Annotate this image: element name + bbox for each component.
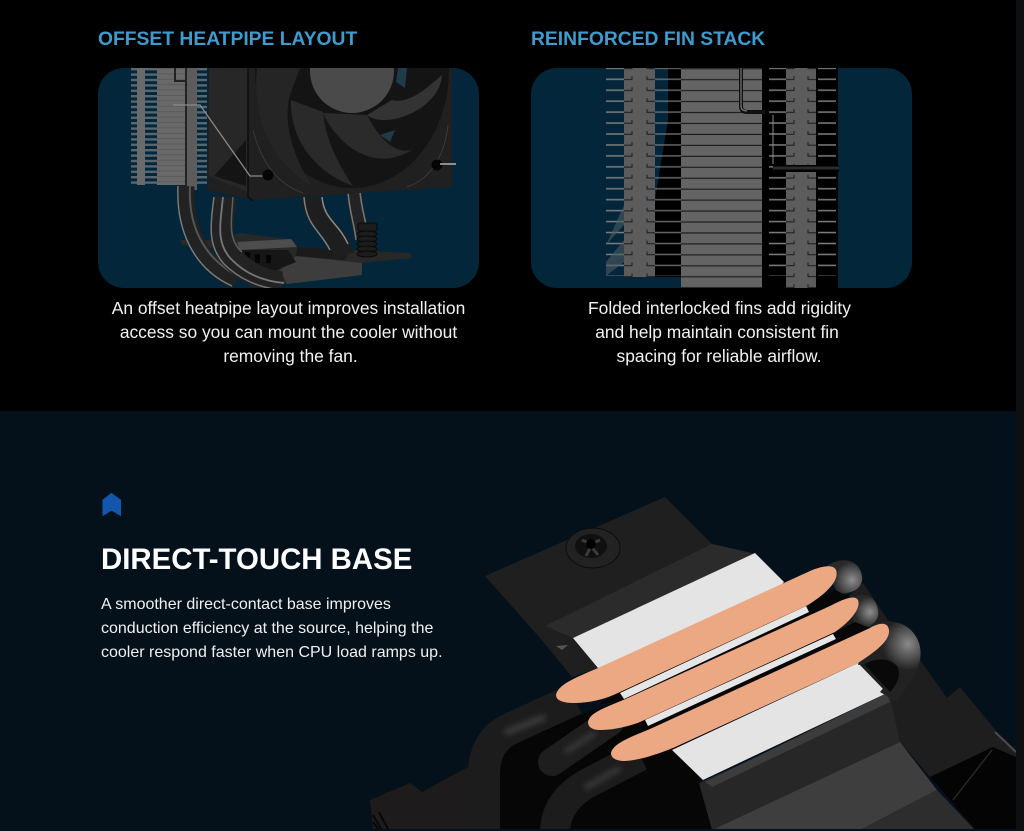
spring screw — [357, 223, 377, 257]
inner right dashes — [769, 68, 786, 276]
description: direct-touch base — [101, 596, 443, 661]
copper contact pills — [556, 566, 889, 761]
heatpipe outline and clip — [741, 68, 839, 172]
left fin column — [624, 68, 655, 277]
caption: offset heatpipe: removing the fan. — [223, 346, 358, 366]
black fin gaps — [655, 68, 838, 288]
gaps between copper pills — [600, 590, 870, 731]
description: direct-touch base: conduction efficiency at the source, helping the — [101, 620, 433, 637]
right plate section — [800, 583, 1016, 777]
illustration: direct-touch cooler base — [370, 497, 1016, 829]
description: direct-touch base: cooler respond faster when CPU load ramps up. — [101, 644, 443, 661]
outer right dashes — [818, 68, 836, 276]
icon: blue bookmark — [102, 493, 121, 516]
caption: reinforced fin stack: Folded interlocked fins add rigidity — [588, 298, 851, 318]
inner left dashes — [655, 68, 681, 276]
caption: reinforced fin stack — [588, 298, 851, 366]
fan clips — [173, 105, 456, 180]
panel: offset heatpipe illustration — [98, 68, 479, 288]
grey base slope — [699, 697, 975, 830]
caption: reinforced fin stack: spacing for reliable airflow. — [617, 346, 821, 366]
dark cavity under pipes — [490, 690, 715, 829]
description: direct-touch base: A smoother direct-contact base improves — [101, 596, 391, 613]
upper silver contact strip — [573, 553, 784, 668]
mounting base plate — [180, 233, 412, 284]
fin stack — [131, 68, 207, 190]
black underside block — [930, 732, 1016, 829]
right margin strip — [1016, 0, 1024, 831]
caption: reinforced fin stack: and help maintain consistent fin — [595, 322, 839, 342]
fan blades — [256, 68, 442, 186]
mounting screw — [566, 528, 620, 568]
caption: offset heatpipe: An offset heatpipe layout improves installation — [112, 298, 465, 318]
caption: offset heatpipe — [112, 298, 465, 366]
panel: reinforced fin stack illustration — [531, 68, 912, 288]
heatpipe tubes — [484, 699, 640, 831]
fan frame — [207, 68, 452, 202]
heading: offset heatpipe layout: OFFSET HEATPIPE LAYOUT — [98, 29, 357, 50]
lower section background — [0, 411, 1024, 831]
heading: reinforced fin stack: REINFORCED FIN STACK — [531, 29, 765, 50]
heatpipe caps — [825, 560, 921, 702]
heatpipes — [178, 186, 367, 290]
caption: offset heatpipe: access so you can mount the cooler without — [120, 322, 457, 342]
heading: direct-touch base: DIRECT-TOUCH BASE — [101, 543, 412, 576]
left fin block — [370, 767, 500, 829]
central fin column — [681, 68, 762, 288]
right fin column — [786, 68, 816, 288]
mounting plate — [485, 497, 756, 677]
left fin tips — [606, 68, 624, 276]
lower silver contact strip — [672, 663, 890, 787]
fan hub — [310, 68, 394, 113]
white strips between pills — [620, 606, 836, 726]
